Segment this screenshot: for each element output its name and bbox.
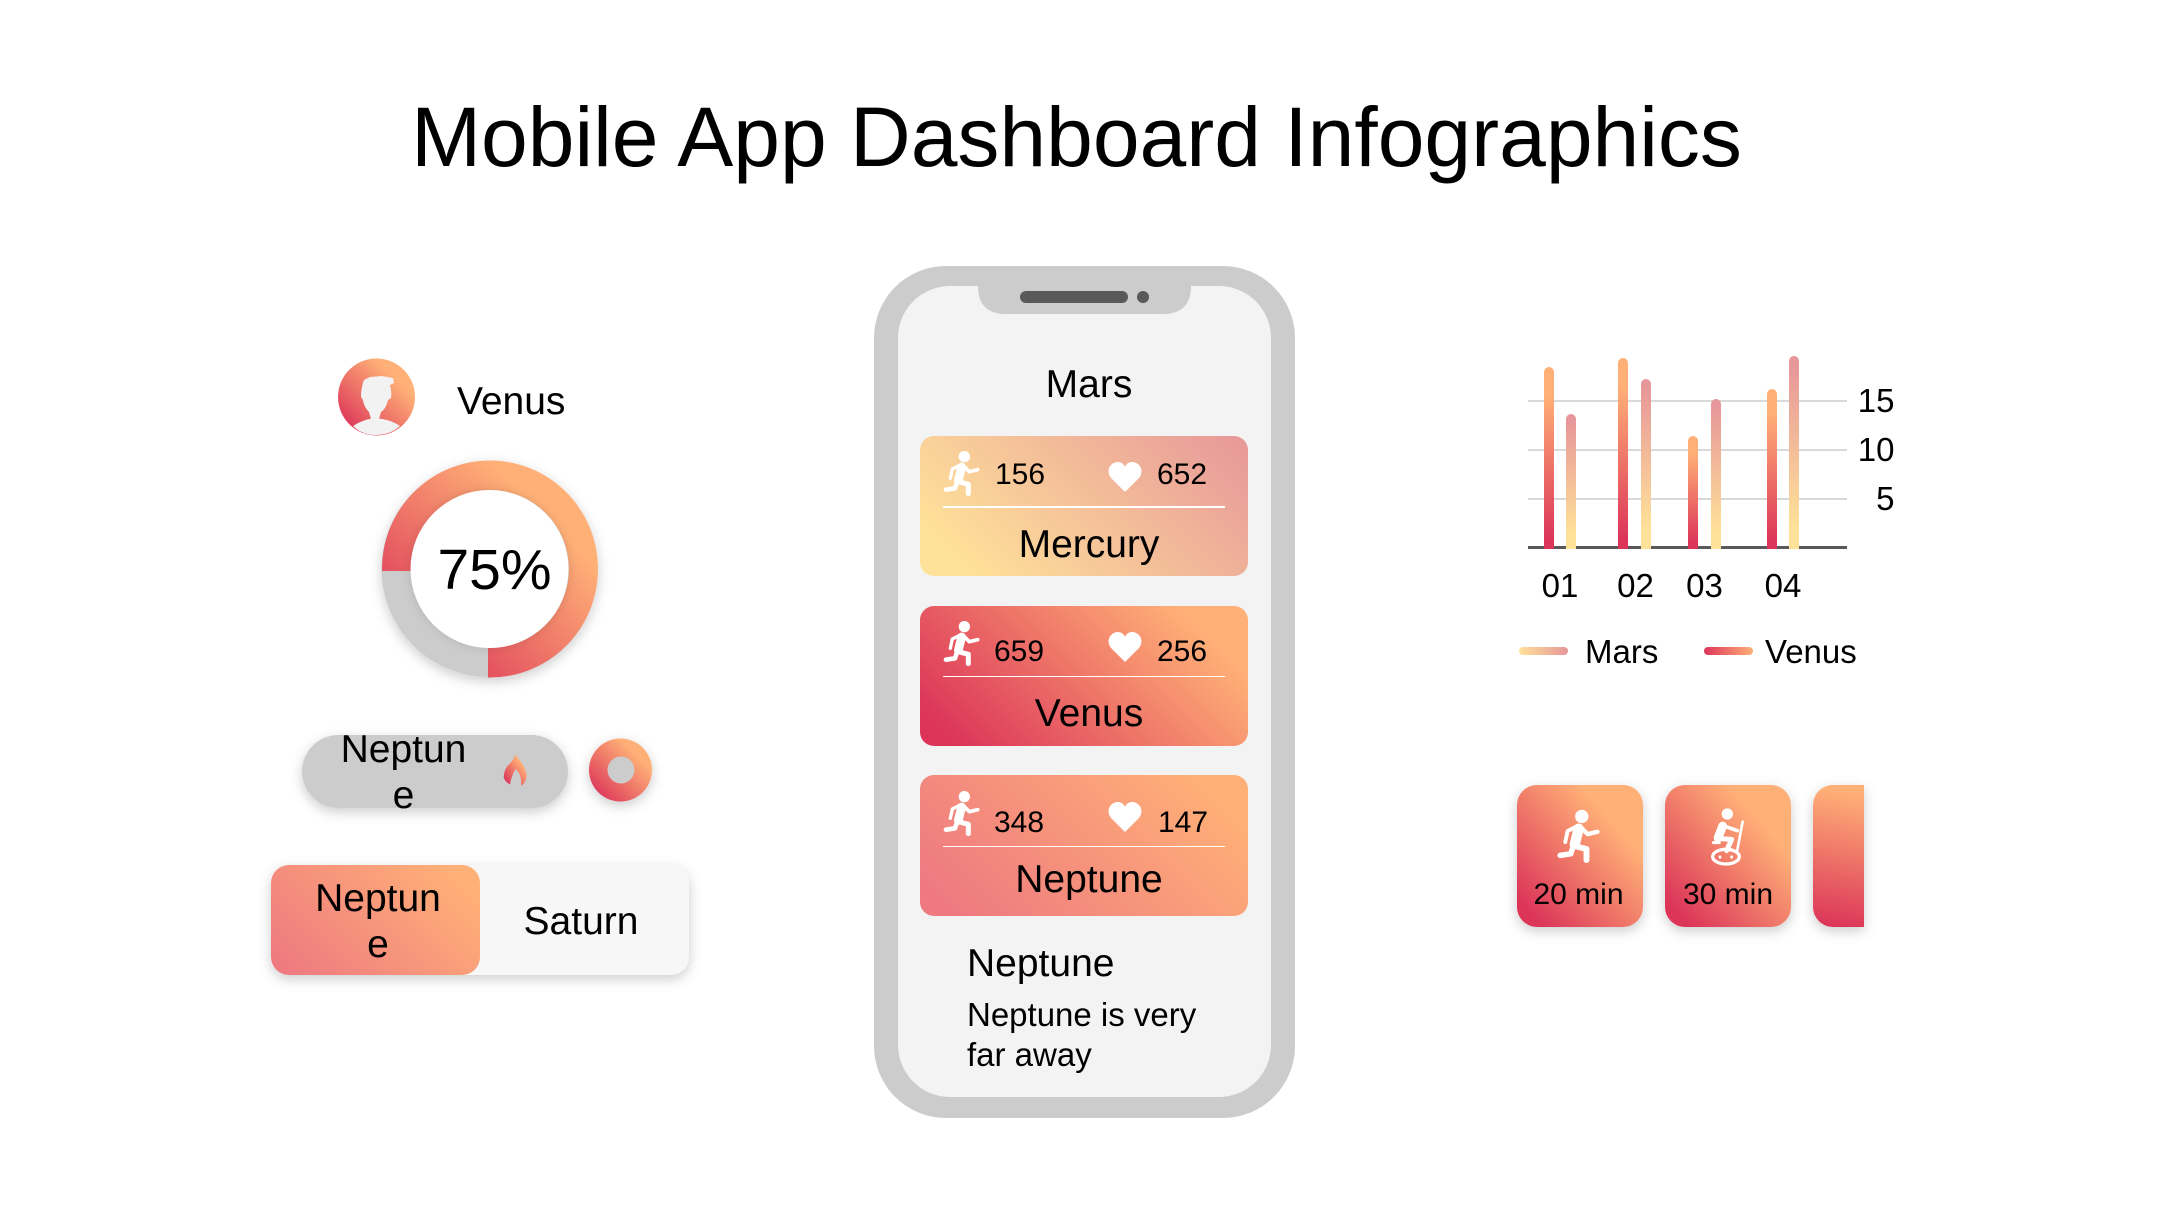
y axis labels: 10 xyxy=(1858,431,1894,468)
panel: phone xyxy=(874,266,1295,1118)
text block: Neptune note: Neptune is very xyxy=(967,996,1197,1033)
icon: heart xyxy=(1109,802,1141,832)
donut chart: 75%: 75% xyxy=(437,538,552,602)
bars: group 02 xyxy=(1618,358,1651,549)
segmented toggle: Neptun xyxy=(315,877,441,920)
pill button with flame xyxy=(302,728,568,817)
icon: runner xyxy=(1560,810,1598,860)
x axis labels: 02 xyxy=(1617,567,1654,604)
card: Venus: 659 xyxy=(994,635,1044,668)
panel: activity tiles xyxy=(1517,785,1864,927)
icon: heart xyxy=(1109,462,1141,492)
icon: runner xyxy=(946,791,978,834)
card: Neptune: 348 xyxy=(994,806,1044,839)
icon: flame xyxy=(504,754,527,786)
icon: avatar xyxy=(338,358,415,436)
icon: exercise bike xyxy=(1713,808,1743,864)
segmented toggle: Saturn xyxy=(524,900,638,943)
title: Mobile App Dashboard Infographics xyxy=(411,90,1742,184)
icon: runner xyxy=(946,621,978,664)
segmented toggle xyxy=(271,865,689,975)
bars: group 04 xyxy=(1767,356,1799,549)
card: Neptune: Neptune xyxy=(1015,858,1163,901)
tile: bike 30 min: 30 min xyxy=(1683,878,1773,911)
card: Neptune xyxy=(920,775,1248,916)
x axis labels: 01 xyxy=(1542,567,1578,604)
phone body xyxy=(874,266,1295,1118)
bars: group 01 xyxy=(1544,367,1576,549)
toggle knob xyxy=(589,738,652,802)
x axis labels: 04 xyxy=(1765,567,1801,604)
x axis labels: 03 xyxy=(1686,567,1723,604)
pill button with flame: Neptun xyxy=(341,728,466,771)
card: Venus: 256 xyxy=(1157,635,1207,668)
segmented toggle: e xyxy=(367,923,389,966)
legend xyxy=(1519,633,1857,670)
card: Neptune: 147 xyxy=(1158,806,1208,839)
icon: runner xyxy=(946,451,978,494)
card: Mercury xyxy=(920,436,1248,576)
donut chart: 75% xyxy=(382,461,598,678)
tile: bike 30 min xyxy=(1665,785,1791,927)
pill button with flame: e xyxy=(393,774,414,817)
phone screen xyxy=(898,286,1271,1097)
tile: run 20 min xyxy=(1517,785,1643,927)
card: Mercury: 652 xyxy=(1157,458,1207,491)
text block: Neptune note xyxy=(967,942,1197,1073)
y axis labels: 15 xyxy=(1858,382,1894,419)
card: Venus: Venus xyxy=(1035,692,1143,735)
tile: run 20 min: 20 min xyxy=(1533,878,1624,911)
card: Mercury: Mercury xyxy=(1019,523,1160,566)
legend: Mars xyxy=(1585,633,1658,670)
legend: Venus xyxy=(1765,633,1857,670)
card: Venus xyxy=(920,606,1248,746)
user name: Venus xyxy=(457,380,565,423)
text block: Neptune note: Neptune xyxy=(967,942,1114,985)
text block: Neptune note: far away xyxy=(967,1036,1092,1073)
tile: partial xyxy=(1813,785,1864,927)
card: Mercury: 156 xyxy=(995,458,1045,491)
y axis labels xyxy=(1858,382,1894,517)
bars: group 03 xyxy=(1688,399,1721,549)
panel: bar chart xyxy=(1519,356,1894,670)
screen heading: Mars xyxy=(1046,363,1132,406)
y axis labels: 5 xyxy=(1876,480,1894,517)
icon: heart xyxy=(1109,632,1141,662)
x axis labels xyxy=(1542,567,1801,604)
panel: profile widgets xyxy=(271,358,689,975)
notch xyxy=(978,284,1191,314)
